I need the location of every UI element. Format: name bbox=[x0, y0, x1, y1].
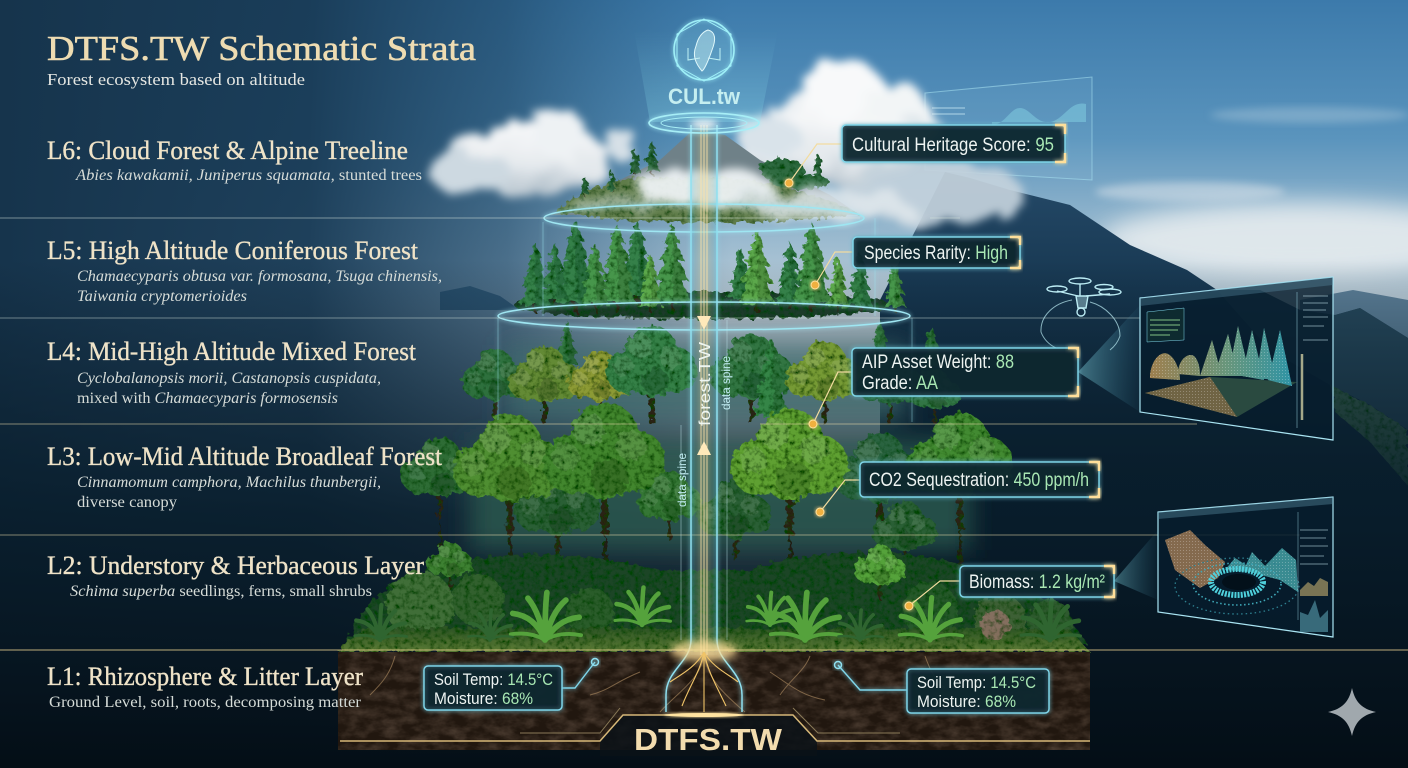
callout: Cultural Heritage Score bbox=[785, 125, 1065, 187]
callout: soil sensor right: Soil Temp: 14.5°C bbox=[917, 673, 1036, 692]
callout: Biomass bbox=[905, 566, 1114, 610]
callout: AIP Asset Weight bbox=[809, 348, 1078, 428]
spine label: data spine upper: data spine bbox=[719, 356, 733, 410]
callout: soil sensor right: Moisture: 68% bbox=[917, 692, 1016, 711]
text block: L4: Cyclobalanopsis morii, Castanopsis cuspidata, bbox=[77, 370, 381, 387]
title: DTFS.TW Schematic Strata bbox=[47, 29, 476, 68]
lower dark overlay bbox=[0, 260, 1408, 768]
callout: Species Rarity bbox=[811, 237, 1020, 289]
icon: drone bbox=[1041, 278, 1121, 350]
text block: L4: mixed with Chamaecyparis formosensis bbox=[77, 390, 338, 407]
text block: L6: L6: Cloud Forest & Alpine Treeline bbox=[47, 136, 408, 165]
DTFS.TW banner: DTFS.TW bbox=[634, 722, 783, 757]
text block: L5: Taiwania cryptomerioides bbox=[77, 288, 247, 305]
arrow: spine down bbox=[697, 316, 711, 330]
text block: L3: diverse canopy bbox=[77, 494, 177, 511]
text block: L2: Schima superba seedlings, ferns, small shrubs bbox=[70, 583, 372, 600]
text block: L5: L5: High Altitude Coniferous Forest bbox=[47, 236, 419, 265]
callout: soil sensor left: Soil Temp: 14.5°C bbox=[434, 670, 553, 689]
text block: L6: Abies kawakamii, Juniperus squamata, stunted trees bbox=[75, 167, 422, 184]
panel: L5 conifer forest bbox=[514, 220, 906, 319]
callout: soil sensor left: Moisture: 68% bbox=[434, 689, 533, 708]
callout: AIP Asset Weight: AIP Asset Weight: 88 bbox=[862, 352, 1014, 373]
background mountains bbox=[440, 172, 1408, 768]
callout: Cultural Heritage Score: Cultural Heritage Score: 95 bbox=[852, 135, 1054, 156]
text block: L3 bbox=[47, 442, 443, 511]
rings of holographic strata bbox=[498, 204, 912, 422]
callout: CO2 Sequestration: CO2 Sequestration: 450 ppm/h bbox=[869, 470, 1089, 491]
panel: point cloud dashboard bbox=[1114, 497, 1333, 637]
text block: L2 bbox=[47, 551, 424, 600]
DTFS.TW banner bbox=[340, 708, 1090, 757]
panel: top-right faint chart bbox=[925, 77, 1092, 180]
spine label: forest.TW: forest.TW bbox=[697, 341, 714, 426]
panel: L6 island with summit bbox=[550, 130, 910, 223]
CUL.tw holographic logo bbox=[634, 19, 778, 133]
text block: L4 bbox=[47, 337, 417, 407]
text block: L1 bbox=[47, 662, 363, 711]
text block: L1: L1: Rhizosphere & Litter Layer bbox=[47, 662, 363, 691]
callout: soil sensor left bbox=[424, 658, 598, 710]
callout: Species Rarity: Species Rarity: High bbox=[864, 243, 1008, 264]
callout: Biomass: Biomass: 1.2 kg/m² bbox=[969, 572, 1105, 593]
stratum divider lines bbox=[0, 218, 1408, 651]
panel: L4 mixed forest bbox=[462, 320, 960, 424]
text block: L6 bbox=[47, 136, 422, 184]
label: CUL.tw: CUL.tw bbox=[668, 84, 741, 109]
text block: L4: L4: Mid-High Altitude Mixed Forest bbox=[47, 337, 417, 366]
panel: soil cross-section bbox=[338, 652, 1090, 750]
central data spine bbox=[666, 125, 742, 712]
spine label: data spine lower: data spine bbox=[675, 453, 689, 507]
icon: sparkle bbox=[1328, 688, 1376, 736]
text block: L1: Ground Level, soil, roots, decomposing matter bbox=[49, 694, 362, 711]
subtitle: Forest ecosystem based on altitude bbox=[47, 70, 305, 89]
text block: L2: L2: Understory & Herbaceous Layer bbox=[47, 551, 424, 580]
panel: LiDAR terrain dashboard bbox=[1078, 277, 1333, 440]
callout: AIP Asset Weight: Grade: AA bbox=[862, 373, 938, 394]
clouds behind mountain peak bbox=[428, 58, 1020, 222]
text block: L5 bbox=[47, 236, 442, 305]
panel: L2 understory bbox=[338, 542, 1090, 652]
fog behind L4 and L3 bbox=[470, 345, 970, 550]
callout: CO2 Sequestration bbox=[816, 462, 1099, 516]
text block: L3: L3: Low-Mid Altitude Broadleaf Forest bbox=[47, 442, 443, 471]
text block: L5: Chamaecyparis obtusa var. formosana, Tsuga chinensis, bbox=[77, 268, 442, 285]
text block: L3: Cinnamomum camphora, Machilus thunbergii, bbox=[77, 474, 381, 491]
arrow: spine up bbox=[697, 441, 711, 455]
panel: L3 broadleaf forest bbox=[401, 403, 1013, 605]
ground strip bbox=[338, 628, 1090, 652]
callout: soil sensor right bbox=[834, 662, 1049, 713]
ground core glow bbox=[670, 641, 738, 661]
